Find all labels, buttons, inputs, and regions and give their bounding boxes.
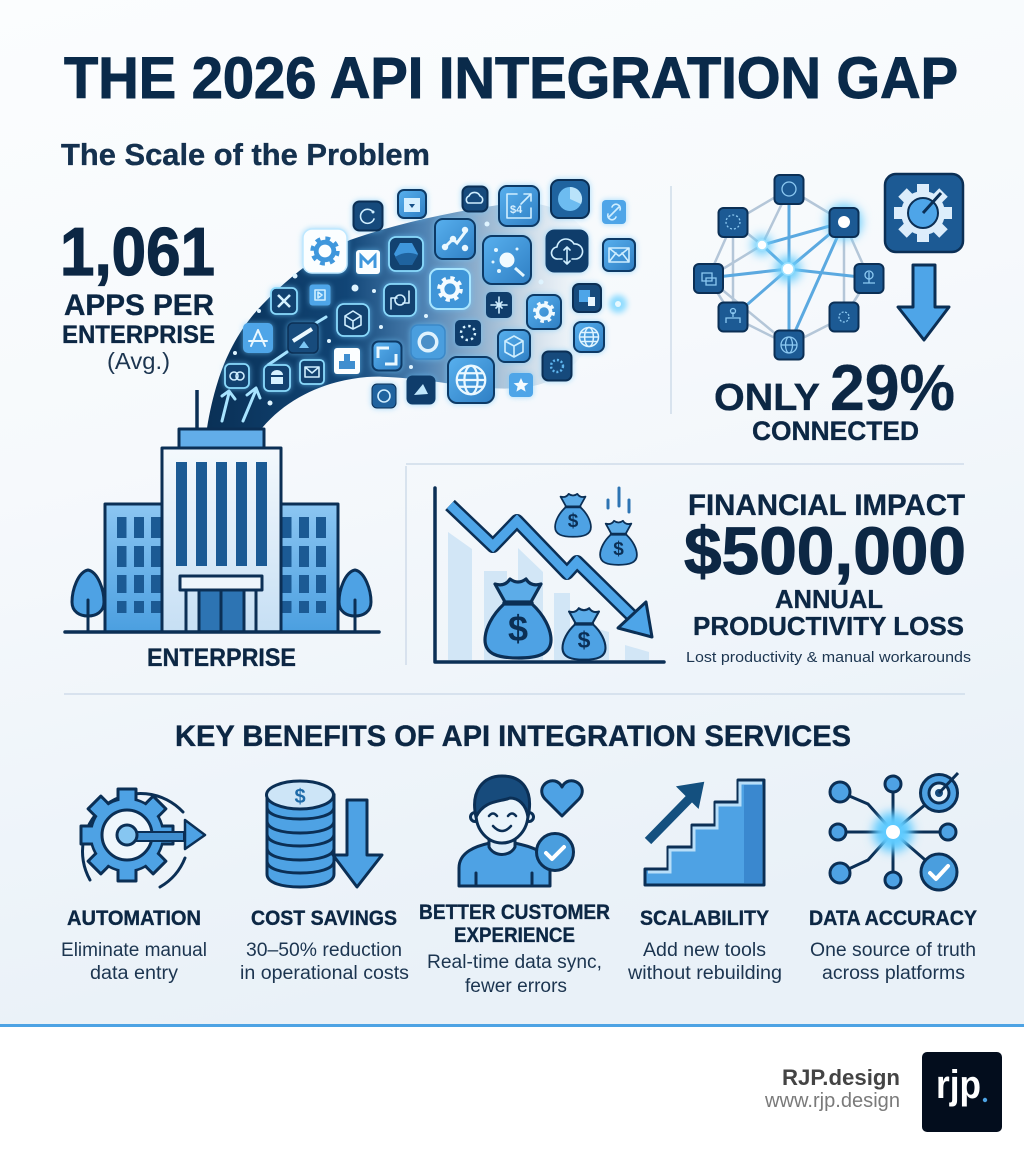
- tile: large globe: [448, 357, 494, 403]
- stat: financial impact: $500,000: [684, 514, 966, 589]
- stat: financial impact: ANNUAL: [775, 584, 883, 614]
- benefit: data accuracy: across platforms: [822, 963, 965, 984]
- tile: nodes: [435, 219, 475, 259]
- stat: 1,061 apps per enterprise: APPS PER: [64, 289, 214, 322]
- faded bars: [448, 532, 649, 660]
- logo: rjp: [936, 1063, 981, 1107]
- benefit: cost savings: in operational costs: [240, 963, 409, 984]
- tile: gear: [527, 295, 561, 329]
- tile: doc: [310, 284, 330, 306]
- icon: happy customer: [459, 776, 582, 886]
- falling ticks: [608, 488, 629, 512]
- tile: cube swirl: [337, 304, 369, 336]
- benefit: automation: Eliminate manual: [61, 940, 207, 961]
- tile: flow: [384, 284, 416, 316]
- tile: hexagon: [389, 237, 423, 271]
- benefit: cost savings: 30–50% reduction: [246, 940, 402, 961]
- sparkle dots: [233, 222, 544, 406]
- section heading: the scale of the problem: The Scale of the Problem: [61, 137, 430, 172]
- benefit: data accuracy: DATA ACCURACY: [809, 907, 977, 930]
- entrance: [199, 590, 244, 632]
- glowing dot: [609, 295, 627, 313]
- stat: financial impact: Lost productivity & manual workarounds: [686, 649, 971, 666]
- main tower: [162, 448, 281, 632]
- tile: building: [334, 348, 360, 374]
- stat: only 29% connected: CONNECTED: [752, 416, 919, 446]
- money bag falling two: $: [613, 539, 624, 560]
- tile: tools: [271, 288, 297, 314]
- tile: ring: [372, 384, 396, 408]
- tile: ring dots: [542, 352, 572, 380]
- brand text: www.rjp.design: [764, 1090, 900, 1112]
- tile: envelope: [603, 239, 635, 271]
- icon: coin stack: [266, 781, 382, 887]
- benefit: better customer experience: [419, 776, 610, 997]
- brand text: [764, 1065, 900, 1112]
- tile: wrench: [288, 323, 318, 353]
- node glyphs: [702, 182, 875, 353]
- tile: gear white: [303, 229, 347, 273]
- benefit: automation: AUTOMATION: [67, 907, 201, 930]
- tower roof: [179, 429, 264, 448]
- tile: mail: [300, 360, 324, 384]
- tile: mail M: [356, 250, 380, 274]
- benefit: cost savings: COST SAVINGS: [251, 907, 397, 930]
- divider lower vertical: [406, 464, 964, 665]
- stat: only 29% connected: [714, 351, 955, 446]
- benefit: automation: [61, 789, 207, 984]
- axes: [435, 488, 664, 662]
- tile: chart: $4: [510, 204, 523, 216]
- upload arrows: [222, 317, 326, 421]
- ground line: [65, 630, 379, 634]
- benefit: better customer experience: BETTER CUSTOMER: [419, 901, 610, 924]
- benefit: data accuracy: [809, 773, 977, 984]
- tile: app store: [243, 323, 273, 353]
- illustration: enterprise building: [65, 390, 379, 632]
- tile: code: [225, 364, 249, 388]
- tile: link: [602, 200, 626, 224]
- tile: cloud: [462, 186, 488, 212]
- benefit: scalability: SCALABILITY: [640, 907, 769, 930]
- stat: only 29% connected: ONLY: [714, 377, 820, 419]
- money bag large: [485, 579, 551, 658]
- icon: gear tile: [885, 174, 963, 252]
- icon: automation gear: [81, 789, 205, 887]
- benefit: automation: data entry: [90, 963, 179, 984]
- stat: 1,061 apps per enterprise: 1,061: [60, 214, 215, 290]
- benefit: cost savings: [240, 781, 409, 984]
- stat: financial impact: [684, 489, 971, 666]
- tile: star: [509, 373, 533, 397]
- brand text: RJP.design: [782, 1065, 900, 1090]
- swoosh: [207, 203, 603, 428]
- icon: growth stairs: [645, 780, 764, 885]
- tile: case: [398, 190, 426, 218]
- benefit: better customer experience: Real-time data sync,: [427, 952, 602, 973]
- label: enterprise: ENTERPRISE: [147, 644, 296, 672]
- app tiles: [225, 180, 635, 408]
- tile: figures: [406, 376, 436, 404]
- benefit: data accuracy: One source of truth: [810, 940, 976, 961]
- right wing: [280, 504, 338, 632]
- heading: key benefits: KEY BENEFITS OF API INTEGRATION SERVICES: [175, 720, 851, 753]
- icon: data hub: [830, 773, 958, 890]
- network diagram: [694, 175, 884, 360]
- tile: android: [264, 365, 290, 391]
- tile: expand: [372, 342, 402, 370]
- stat: 1,061 apps per enterprise: [60, 214, 215, 374]
- left wing: [105, 504, 163, 632]
- tile: radar: [354, 202, 382, 230]
- app swarm flowing out of the building: [207, 180, 635, 428]
- tile: dough: [411, 325, 445, 359]
- tile: cloud upload: [546, 230, 588, 272]
- stat: financial impact: FINANCIAL IMPACT: [688, 489, 965, 522]
- tile: dots: [455, 320, 481, 346]
- tile: sun burst: [483, 236, 531, 284]
- benefit: better customer experience: fewer errors: [465, 976, 567, 997]
- tile: gear cyan: [430, 269, 470, 309]
- tile: pie: [551, 180, 589, 218]
- arrow: down: [898, 265, 949, 340]
- network nodes: [694, 175, 884, 360]
- money bag medium: $: [578, 627, 591, 653]
- trees: [72, 570, 104, 616]
- money bag falling one: [555, 494, 591, 537]
- trend arrow: [450, 505, 632, 616]
- title: THE 2026 API INTEGRATION GAP: [64, 46, 958, 111]
- stat: 1,061 apps per enterprise: ENTERPRISE: [62, 321, 215, 349]
- footer band: [0, 1024, 1024, 1154]
- stat: financial impact: PRODUCTIVITY LOSS: [693, 611, 964, 641]
- stat: only 29% connected: 29%: [830, 351, 955, 424]
- glowing hubs: [752, 204, 862, 282]
- chart: falling revenue: [435, 488, 664, 662]
- money bag falling two: [600, 521, 637, 565]
- money bag large: $: [508, 608, 528, 649]
- divider horizontal: [64, 693, 965, 695]
- benefit: better customer experience: EXPERIENCE: [454, 924, 575, 947]
- tile: chart: [499, 186, 539, 226]
- tile: cross: [486, 292, 512, 318]
- icon: coin stack: $: [294, 786, 306, 808]
- tile: globe small: [574, 322, 604, 352]
- logo: [922, 1052, 1002, 1132]
- money bag medium: [563, 608, 605, 660]
- divider vertical top: [670, 186, 672, 414]
- tile: copy: [573, 284, 601, 312]
- money bag falling one: $: [568, 511, 579, 532]
- benefit: scalability: without rebuilding: [627, 963, 782, 984]
- tile: box: [498, 330, 530, 362]
- benefit: scalability: Add new tools: [643, 940, 766, 961]
- stat: 1,061 apps per enterprise: (Avg.): [107, 348, 170, 374]
- benefit: scalability: [627, 780, 782, 984]
